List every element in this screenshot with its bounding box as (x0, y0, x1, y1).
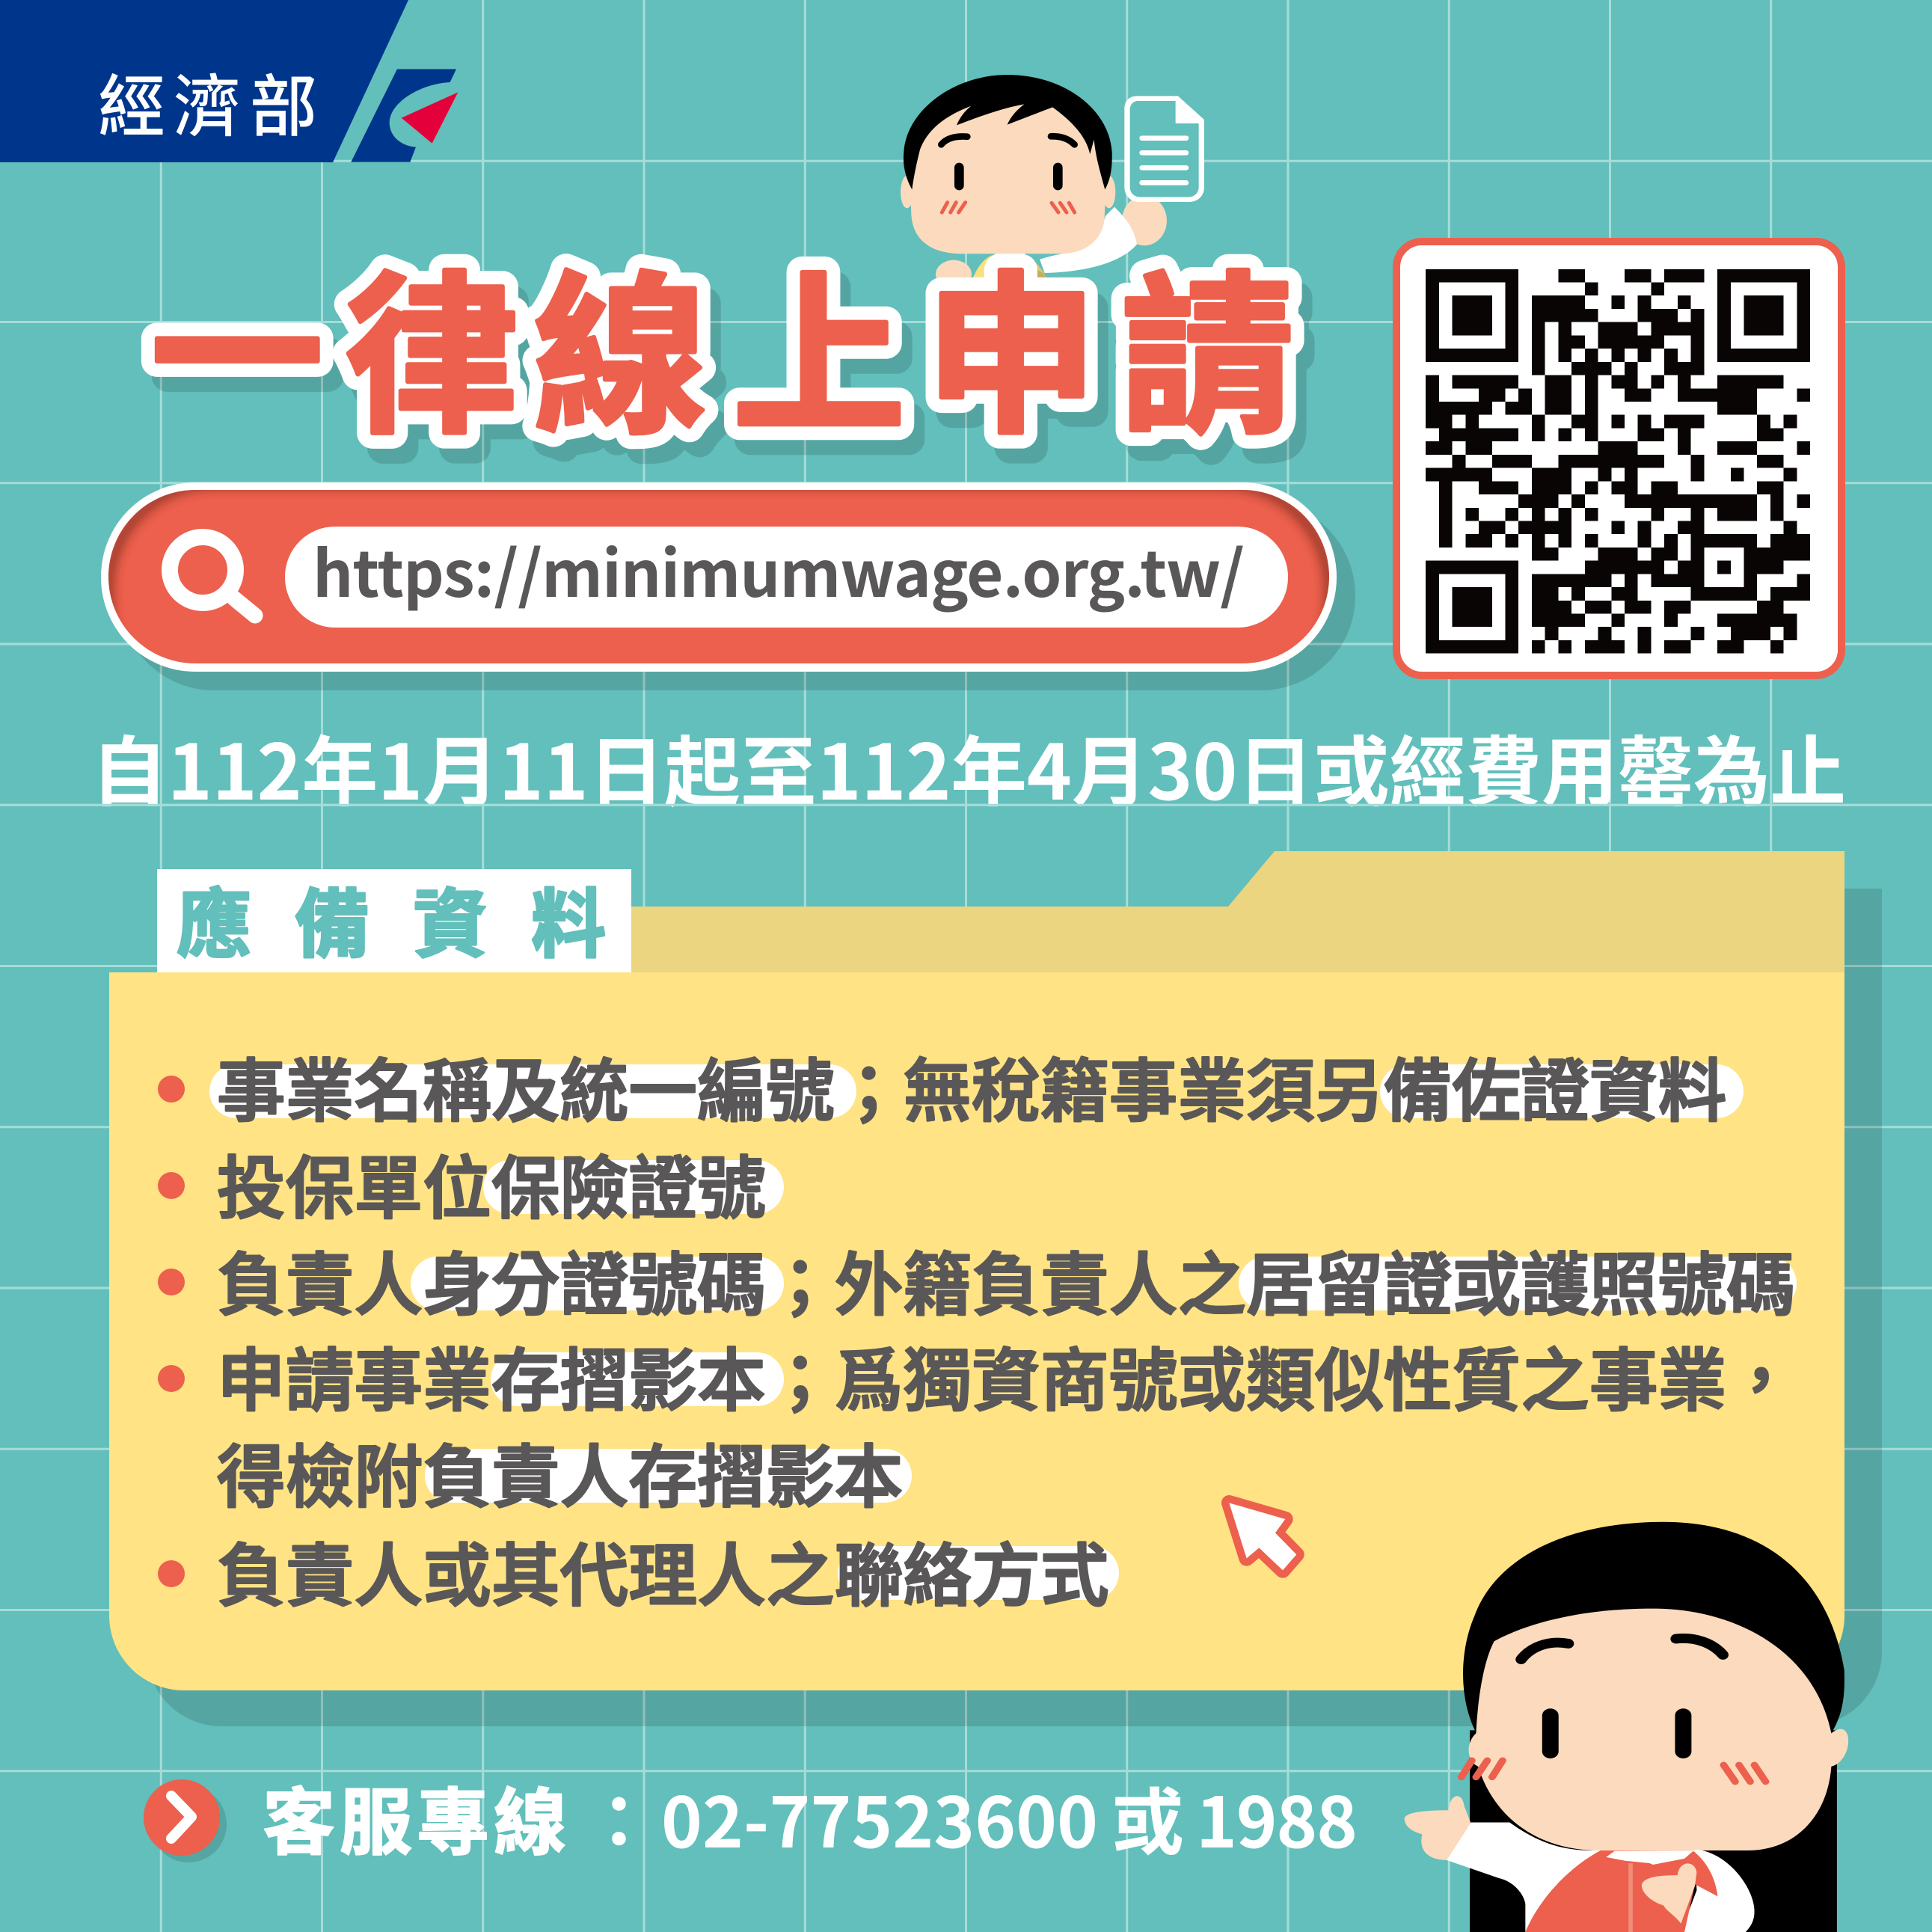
search bar fill (108, 490, 1329, 663)
service label: 或 (1111, 1764, 1184, 1869)
icon: chevron badge (144, 1779, 227, 1862)
girl pointing hand (1405, 1796, 1471, 1860)
boy hand holding document (1122, 196, 1167, 245)
icon: ministry logo (351, 69, 458, 162)
girl chest hand (1642, 1863, 1696, 1924)
boy sleeve (1040, 207, 1137, 273)
search bar (101, 482, 1355, 708)
girl vest (1525, 1850, 1717, 1932)
girl brows (1521, 1638, 1723, 1659)
title shadow: 一律線上申請 (161, 231, 1304, 482)
folder back tab (157, 851, 1844, 972)
customer service line (144, 1764, 1358, 1869)
icon: document (1124, 96, 1204, 202)
QR frame (1396, 242, 1841, 675)
url text: https://minimumwage.org.tw/ (313, 524, 1245, 616)
girl back hair (1470, 1730, 1837, 1932)
icon: magnifier (170, 537, 255, 616)
boy body (972, 254, 1047, 279)
requirements list: 申請事業存摺影本；爲獨資商號或類似性質之事業， (217, 1326, 1795, 1425)
requirements list: 事業名稱及統一編號；無稅籍事業須另備佐證資料 (217, 1037, 1727, 1135)
section label: 應備資料 (177, 864, 606, 972)
ministry header banner (0, 0, 458, 162)
girl character (1405, 1522, 1848, 1932)
service label: 客服專線 (263, 1764, 566, 1869)
requirements list: 負責人或其代理人之聯絡方式 (217, 1521, 1109, 1620)
search bar outline (101, 482, 1337, 672)
url field (285, 527, 1288, 628)
navy banner (0, 0, 408, 162)
text highlights (209, 1064, 1797, 1600)
boy character holding document (901, 75, 1204, 289)
requirements list: 負責人身分證號碼；外籍負責人之居留證或護照號碼 (217, 1230, 1795, 1329)
boy left hand (936, 260, 972, 289)
title outline: 一律線上申請 (150, 216, 1294, 467)
girl arm (1447, 1822, 1699, 1932)
requirements list: 得檢附負責人存摺影本 (217, 1423, 904, 1521)
search bar shadow (120, 501, 1355, 690)
bullets (158, 1076, 185, 1587)
girl collar (1606, 1851, 1693, 1865)
folder panel: required documents (109, 851, 1882, 1726)
boy head (901, 75, 1115, 254)
girl face (1469, 1609, 1848, 1850)
service label: 02-77523600 (661, 1767, 1098, 1868)
ministry name: 經濟部 (98, 52, 317, 150)
girl zipper (1626, 1863, 1635, 1932)
title (150, 216, 1304, 482)
girl blush (1462, 1761, 1766, 1782)
girl eyes (1542, 1708, 1691, 1758)
QR code (1426, 269, 1810, 654)
folder front (109, 972, 1844, 1690)
requirements list (217, 1037, 1795, 1620)
service label: ： (583, 1764, 655, 1869)
requirements list: 投保單位保險證號 (217, 1134, 766, 1233)
application period: 自112年1月11日起至112年4月30日或經費用罄為止 (91, 712, 1846, 822)
title text: 一律線上申請 (150, 216, 1294, 467)
service label: 1988 (1196, 1767, 1358, 1868)
folder shadow (147, 889, 1882, 1726)
icon: cursor arrow (1229, 1503, 1296, 1570)
girl sleeve (1681, 1850, 1755, 1932)
QR code panel (1396, 242, 1841, 675)
service label (263, 1764, 1358, 1869)
girl hair (1463, 1522, 1844, 1733)
